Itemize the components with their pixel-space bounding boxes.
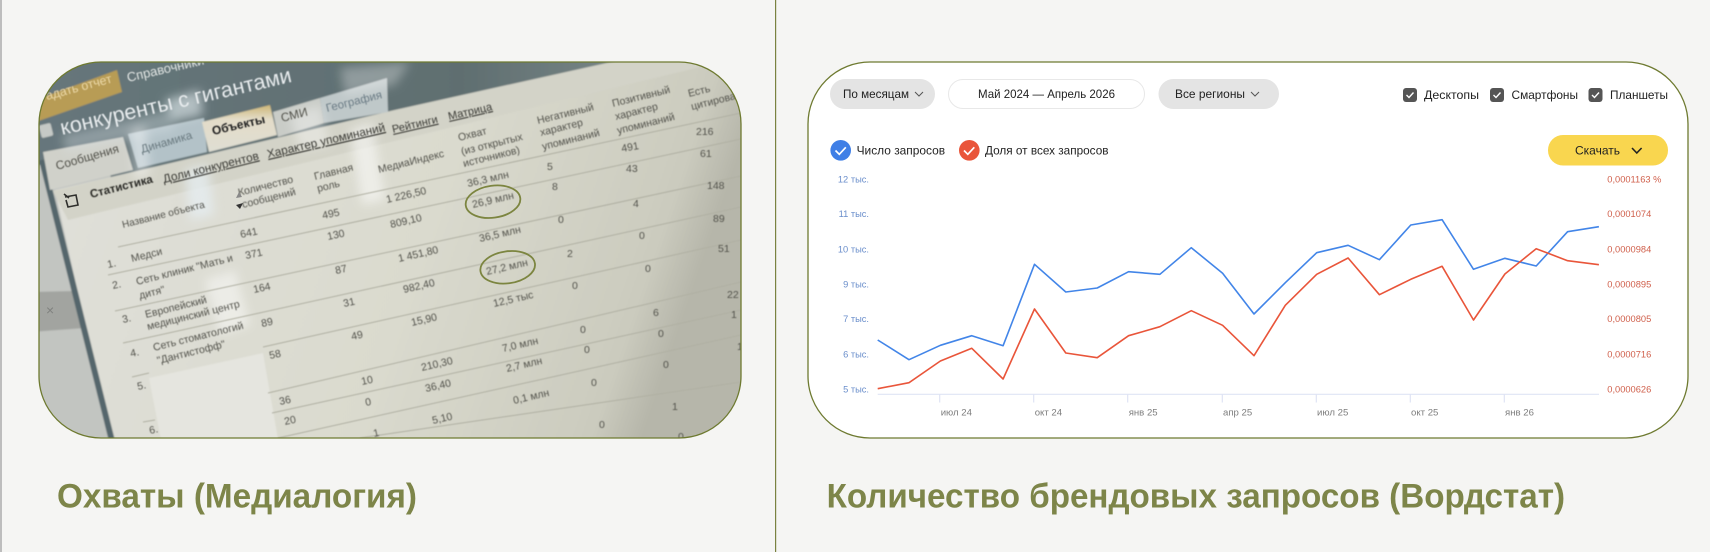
- photo text: 5,10: [431, 411, 454, 427]
- photo text: 0: [663, 359, 669, 371]
- photo text: 43: [626, 163, 638, 175]
- chart: left axis labels: 11 тыс.: [839, 209, 869, 219]
- photo text: характер: [614, 101, 659, 123]
- chart: right axis labels: 0,0000984: [1607, 245, 1651, 255]
- photo text: 0: [591, 377, 597, 389]
- photo text: конкуренты с гигантами: [58, 63, 294, 140]
- legend: query count: [830, 140, 945, 161]
- panel: wordstat chart card: [808, 62, 1688, 438]
- photo text: 164: [252, 281, 272, 296]
- checkbox: desktops: Десктопы: [1424, 88, 1479, 102]
- photo text: 27,2 млн: [485, 257, 529, 278]
- chart: left axis labels: [838, 175, 869, 394]
- photo text: дитя": [138, 284, 166, 302]
- photo text: 216: [696, 126, 714, 138]
- photo text: 5: [547, 161, 553, 173]
- photo text: Характер упоминаний: [266, 120, 386, 161]
- highlight: 27,2 млн circled: [478, 248, 537, 287]
- photo text: 58: [268, 348, 282, 362]
- photo text: 12,5 тыс: [492, 289, 535, 310]
- chart: x axis: июл 25: [1317, 408, 1348, 418]
- photo text: 371: [244, 247, 264, 262]
- chart: x axis: янв 25: [1129, 408, 1158, 418]
- chart: right axis labels: [1607, 175, 1661, 394]
- photo text: 1.: [106, 257, 117, 271]
- photo text: источников): [462, 144, 521, 170]
- photo text: 4.: [129, 346, 140, 360]
- chart: x axis: апр 25: [1223, 408, 1252, 418]
- chart: left axis labels: 12 тыс.: [838, 175, 869, 185]
- photo text: Есть: [687, 83, 712, 100]
- photo text: 36,40: [424, 377, 452, 395]
- photo text: "Дантистофф": [156, 338, 227, 367]
- photo text: 148: [707, 180, 725, 192]
- photo text: 0: [572, 280, 578, 292]
- chart: x axis: янв 26: [1505, 408, 1534, 418]
- photo text: Доли конкурентов: [161, 149, 260, 186]
- photo text: 0: [584, 344, 590, 356]
- photo text: Европейский: [144, 294, 208, 321]
- photo text: 1: [672, 401, 678, 413]
- photo text: География: [325, 89, 383, 115]
- photo text: роль: [316, 178, 342, 195]
- chart line: share of all queries: [878, 249, 1599, 389]
- button: download: Скачать: [1575, 144, 1620, 158]
- photo text: 26,9 млн: [471, 190, 515, 211]
- photo text: 1 451,80: [397, 244, 440, 265]
- photo text: Позитивный: [611, 84, 672, 110]
- highlight: 26,9 млн circled: [464, 182, 522, 221]
- chart: left axis labels: 9 тыс.: [843, 279, 869, 289]
- photo text: 36,5 млн: [478, 224, 522, 245]
- photo text: 495: [321, 207, 341, 222]
- chart: x axis: июл 24: [941, 408, 973, 418]
- photo text: 2.: [111, 278, 122, 292]
- photo text: 0: [639, 230, 645, 242]
- photo text: 89: [260, 316, 274, 330]
- photo text: 0: [678, 431, 684, 443]
- photo text: 0: [599, 419, 605, 431]
- photo text: 130: [326, 228, 346, 243]
- chart: left axis labels: 6 тыс.: [843, 350, 869, 360]
- photo text: 0: [658, 328, 664, 340]
- control: regions: [1158, 79, 1279, 109]
- photo text: 89: [713, 213, 725, 225]
- photo text: Сеть клиник "Мать и: [135, 252, 234, 288]
- photo text: 491: [620, 140, 640, 155]
- photo text: 87: [334, 263, 348, 277]
- table rows: [108, 113, 741, 438]
- photo text: 4: [633, 198, 639, 210]
- photo text: упоминаний: [541, 127, 601, 153]
- chart: right axis labels: 0,0000895: [1607, 279, 1651, 289]
- button: download: [1548, 135, 1668, 166]
- control: date range: Май 2024 — Апрель 2026: [978, 87, 1115, 101]
- checkbox: smartphones: Смартфоны: [1512, 88, 1578, 102]
- photo text: 2: [567, 248, 573, 260]
- photo text: 210,30: [420, 355, 454, 374]
- photo text: 51: [718, 243, 730, 255]
- chart: right axis labels: 0,0000716: [1607, 350, 1651, 360]
- photo text: 1: [731, 309, 737, 321]
- control: period selector: По месяцам: [843, 87, 909, 101]
- photo text: 8: [552, 181, 558, 193]
- legend: query count: Число запросов: [857, 144, 945, 158]
- chart: right axis labels: 0,0001074: [1607, 209, 1651, 219]
- photo text: 61: [700, 148, 712, 160]
- checkbox: tablets: Планшеты: [1610, 88, 1668, 102]
- photo text: 1: [737, 341, 743, 353]
- chart line: query count: [878, 220, 1599, 360]
- photo text: медицинский центр: [146, 298, 241, 333]
- photo text: Название объекта: [121, 199, 206, 231]
- photo text: [44, 53, 743, 443]
- photo text: Сообщения: [54, 141, 120, 173]
- photo text: Рейтинги: [391, 114, 439, 136]
- photo text: Объекты: [211, 112, 266, 138]
- photo text: Матрица: [447, 101, 494, 123]
- legend: share of all queries: [959, 140, 1108, 161]
- photo text: 1: [372, 427, 380, 440]
- chart: left axis labels: 5 тыс.: [843, 384, 869, 394]
- photo text: Главная: [313, 162, 355, 183]
- photo text: (из открытых: [460, 131, 525, 158]
- photo text: 20: [283, 414, 297, 428]
- chart: left axis labels: 10 тыс.: [838, 245, 869, 255]
- control: regions: Все регионы: [1175, 87, 1245, 101]
- photo text: 641: [239, 226, 259, 241]
- photo text: Статистика: [89, 174, 155, 201]
- icon: export: [64, 194, 78, 207]
- photo text: 0: [364, 396, 372, 409]
- photo text: Негативный: [536, 101, 595, 127]
- photo text: 1 226,50: [385, 185, 428, 206]
- photo text: 809,10: [389, 212, 423, 231]
- control: date range: [948, 80, 1144, 108]
- chart: right axis labels: 0,0000626: [1607, 384, 1651, 394]
- photo text: сообщений: [241, 186, 297, 211]
- photo text: 36: [278, 394, 292, 408]
- photo text: Динамика: [140, 130, 194, 156]
- photo text: 15,90: [410, 311, 438, 329]
- chart: x axis: окт 24: [1035, 408, 1063, 418]
- control: period selector: [830, 79, 935, 109]
- photo text: 6: [653, 307, 659, 319]
- photo text: 31: [342, 296, 356, 310]
- panel: photo of media report table: ×: [46, 302, 54, 318]
- photo text: 3.: [121, 312, 132, 326]
- reflections on the screen: [62, 62, 410, 335]
- photo text: 982,40: [402, 277, 436, 296]
- photo text: 49: [350, 329, 364, 343]
- photo text: СМИ: [279, 105, 309, 125]
- photo text: 0: [558, 214, 564, 226]
- chart: x axis: [878, 394, 1599, 418]
- photo text: 7,0 млн: [501, 335, 540, 355]
- photo text: Количество: [237, 174, 295, 199]
- photo text: 10: [360, 374, 374, 388]
- photo text: упоминаний: [616, 111, 676, 137]
- photo text: 22: [727, 289, 739, 301]
- photo text: 6.: [148, 423, 159, 437]
- chart: left axis labels: 7 тыс.: [843, 314, 869, 324]
- photo text: 0,1 млн: [512, 387, 551, 407]
- photo text: Медси: [130, 246, 164, 265]
- photo text: 5.: [136, 379, 147, 393]
- chart: x axis: окт 25: [1411, 408, 1438, 418]
- heading: branded queries: Количество брендовых запросов (Вордстат): [827, 477, 1565, 515]
- photo text: Сеть стоматологий: [152, 320, 245, 354]
- photo text: адать отчет: [44, 72, 114, 103]
- photo text: 36,3 млн: [466, 169, 510, 190]
- heading: reach: Охваты (Медиалогия): [57, 477, 417, 515]
- chart: right axis labels: 0,0001163 %: [1607, 175, 1661, 185]
- photo text: МедиаИндекс: [377, 148, 445, 176]
- photo text: цитирова: [690, 90, 737, 113]
- photo text: 2,7 млн: [505, 355, 544, 375]
- photo text: 0: [580, 324, 586, 336]
- legend: share of all queries: Доля от всех запросов: [985, 144, 1108, 158]
- photo text: характер: [539, 117, 584, 139]
- photo text: Охват: [457, 125, 488, 144]
- photo text: 0: [645, 263, 651, 275]
- chart: right axis labels: 0,0000805: [1607, 314, 1651, 324]
- photo text: Справочники: [125, 53, 205, 85]
- panel: photo of media report table: [30, 40, 750, 450]
